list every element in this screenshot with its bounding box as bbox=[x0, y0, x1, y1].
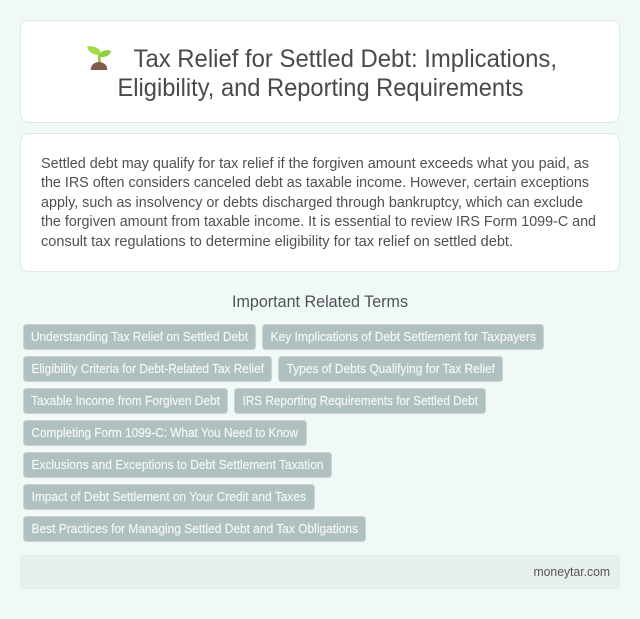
chip: Understanding Tax Relief on Settled Debt bbox=[31, 329, 248, 344]
text block: description: the forgiven amount from taxable income. It is essential to review IRS Form 1099-C and bbox=[41, 213, 596, 230]
text block: description: apply, such as insolvency or debts discharged through bankruptcy, which can exclude bbox=[41, 194, 583, 211]
chip: Impact of Debt Settlement on Your Credit and Taxes bbox=[32, 489, 306, 504]
chip bbox=[234, 388, 486, 414]
title: Eligibility, and Reporting Requirements bbox=[118, 74, 524, 102]
heading: important related terms: Important Related Terms bbox=[232, 293, 408, 311]
chip: IRS Reporting Requirements for Settled Debt bbox=[242, 393, 478, 408]
title bbox=[118, 45, 557, 102]
text block: description bbox=[41, 155, 596, 250]
chip: Key Implications of Debt Settlement for Taxpayers bbox=[270, 329, 536, 344]
text block: description: consult tax regulations to determine eligibility for tax relief on settled debt. bbox=[41, 233, 513, 250]
panel: title card bbox=[20, 20, 620, 122]
chip bbox=[24, 356, 272, 382]
chip: Best Practices for Managing Settled Debt and Tax Obligations bbox=[32, 521, 358, 536]
chip bbox=[24, 388, 228, 414]
panel: term chips bbox=[24, 324, 544, 542]
text block: description: the IRS often considers canceled debt as taxable income. However, certain exceptions bbox=[41, 174, 589, 191]
chip: Completing Form 1099-C: What You Need to Know bbox=[32, 425, 299, 440]
panel: footer bbox=[20, 555, 620, 589]
footer source text: moneytar.com bbox=[534, 564, 610, 579]
chip bbox=[262, 324, 544, 350]
title: Tax Relief for Settled Debt: Implications, bbox=[134, 45, 557, 73]
chip: Taxable Income from Forgiven Debt bbox=[31, 393, 220, 408]
chip bbox=[24, 452, 332, 478]
chip bbox=[24, 484, 314, 510]
icon: sprout bbox=[87, 46, 111, 70]
text block: description: Settled debt may qualify for tax relief if the forgiven amount exceeds what you paid, as bbox=[41, 155, 589, 172]
chip bbox=[24, 516, 366, 542]
chip: Exclusions and Exceptions to Debt Settlement Taxation bbox=[32, 457, 324, 472]
chip bbox=[24, 324, 256, 350]
chip bbox=[278, 356, 502, 382]
chip: Types of Debts Qualifying for Tax Relief bbox=[286, 361, 495, 376]
panel: description card bbox=[20, 134, 620, 272]
chip bbox=[24, 420, 306, 446]
chip: Eligibility Criteria for Debt-Related Tax Relief bbox=[32, 361, 264, 376]
